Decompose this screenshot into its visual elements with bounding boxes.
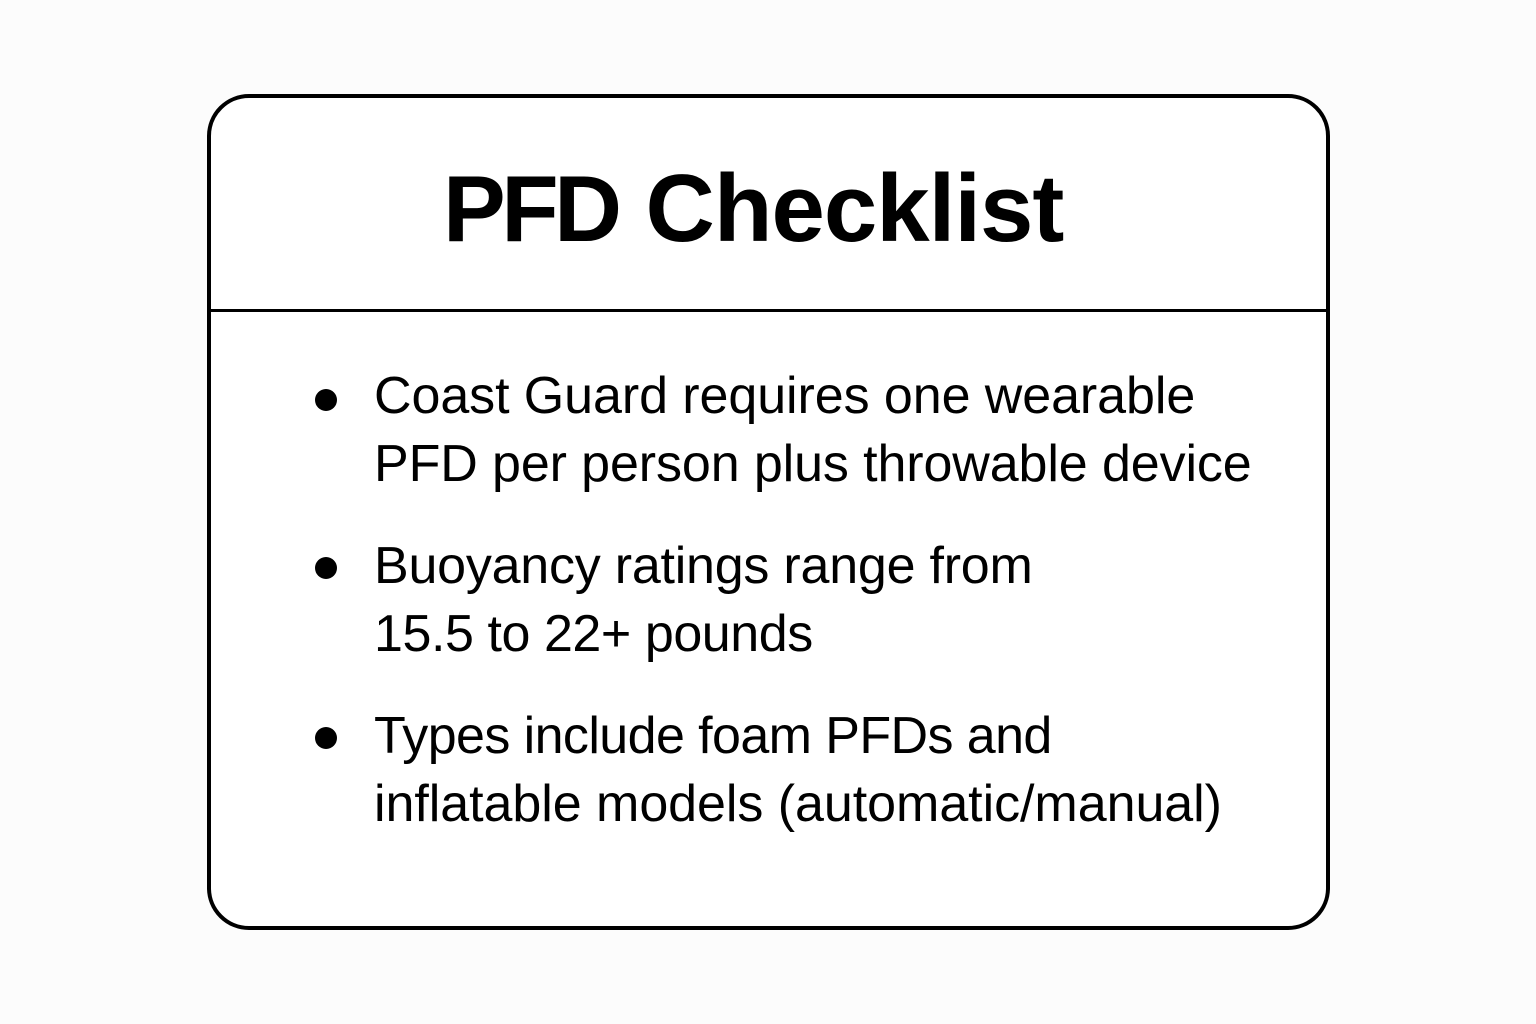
bullet icon: Coast Guard [315,389,337,411]
text: buoyancy line 2: 15.5 to 22+ pounds [374,605,813,663]
text: buoyancy line 1: Buoyancy ratings range from [374,537,1033,595]
bullet icon: buoyancy [315,557,337,579]
text: types line 1: Types include foam PFDs and [374,707,1052,765]
title: PFD [443,156,618,261]
title [443,155,1064,262]
title: Checklist [646,155,1063,262]
bullet icon: types [315,727,337,749]
header divider [209,309,1328,312]
panel: checklist card [207,94,1330,930]
text: Coast Guard requirement line 2: PFD per person plus throwable device [374,435,1252,493]
text: Coast Guard requirement line 1: Coast Guard requires one wearable [374,367,1195,425]
text: types line 2: inflatable models (automatic/manual) [374,775,1222,833]
